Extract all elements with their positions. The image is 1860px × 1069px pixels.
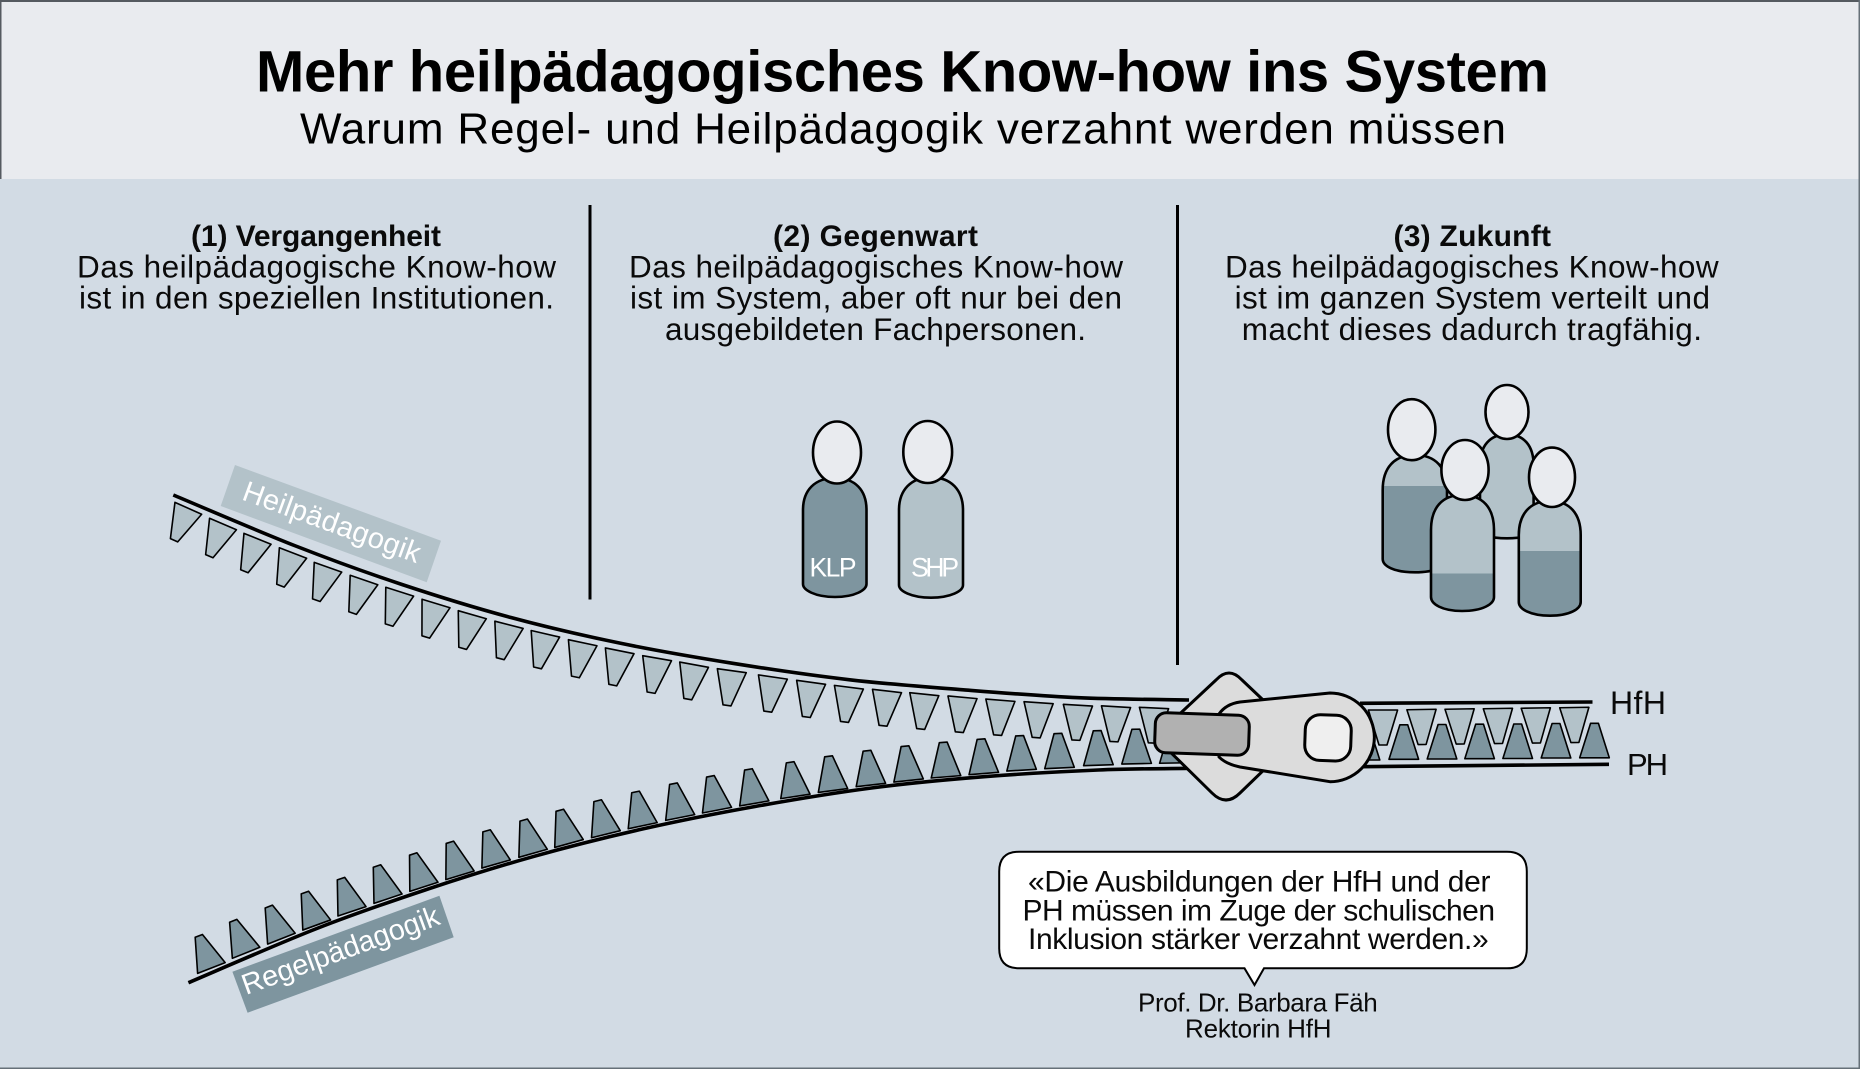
body: column 1: Das heilpädagogische Know-how	[77, 248, 556, 284]
icon: person KLP: KLP	[810, 552, 856, 582]
label: PH: PH	[1627, 747, 1668, 782]
pull tab hole	[1304, 714, 1352, 761]
label tag: Heilpädagogik	[221, 465, 441, 582]
text block: column 2 Gegenwart: ist im System, aber oft nur bei den	[630, 280, 1122, 316]
slider pull tab	[1219, 693, 1374, 782]
person front right	[1516, 448, 1584, 619]
heading: Gegenwart: (2) Gegenwart	[773, 220, 978, 253]
slider body diamond	[1155, 673, 1300, 800]
person back left	[1380, 399, 1450, 576]
zipper: top rail right part	[1360, 702, 1592, 703]
heading: Zukunft: (3) Zukunft	[1394, 220, 1551, 253]
quote attribution: Prof. Dr. Barbara Fäh	[1138, 988, 1378, 1018]
text block: column 3 Zukunft	[1225, 220, 1719, 347]
person back right	[1480, 385, 1534, 538]
text block: column 2 Gegenwart: ausgebildeten Fachpersonen.	[665, 311, 1086, 347]
zipper slider	[1154, 673, 1374, 800]
quote attribution: Rektorin HfH	[1185, 1013, 1332, 1043]
person front middle	[1428, 440, 1498, 614]
label: HfH: HfH	[1610, 685, 1666, 721]
zipper: lower teeth Regelpädagogik	[185, 723, 1609, 973]
text block: column 3 Zukunft: macht dieses dadurch tragfähig.	[1242, 311, 1702, 347]
text block: column 2 Gegenwart	[629, 220, 1123, 347]
callout: quote bubble: Inklusion stärker verzahnt werden.»	[1028, 923, 1489, 956]
icon: person SHP	[899, 421, 963, 598]
subtitle: Warum Regel- und Heilpädagogik verzahnt werden müssen	[300, 104, 1506, 153]
quote attribution	[1138, 988, 1378, 1043]
body: column 3: Das heilpädagogisches Know-how	[1225, 248, 1719, 284]
zipper: top rail	[173, 495, 1189, 700]
zipper: bottom rail right part	[1360, 764, 1609, 767]
zipper: bottom rail	[188, 768, 1189, 983]
zipper: upper teeth Heilpädagogik	[161, 502, 1590, 745]
divider left	[588, 205, 592, 600]
title: Mehr heilpädagogisches Know-how ins System	[256, 40, 1549, 105]
text block: column 1 Vergangenheit: ist in den speziellen Institutionen.	[79, 280, 554, 316]
label tag: Regelpädagogik: Regelpädagogik	[237, 900, 444, 1002]
icon: person SHP: SHP	[911, 552, 959, 582]
label tag: Heilpädagogik: Heilpädagogik	[238, 476, 425, 570]
icon: group of four people	[1380, 385, 1584, 619]
callout: quote bubble: «Die Ausbildungen der HfH und der	[1028, 866, 1490, 899]
icon: person KLP	[803, 422, 866, 597]
callout: quote bubble	[999, 852, 1527, 985]
panel: header band	[0, 0, 1860, 179]
text block: column 3 Zukunft: ist im ganzen System verteilt und	[1235, 280, 1710, 316]
text block: column 1 Vergangenheit	[77, 220, 556, 316]
body: column 2: Das heilpädagogisches Know-how	[629, 248, 1123, 284]
heading: Vergangenheit: (1) Vergangenheit	[191, 220, 441, 253]
callout: quote bubble: PH müssen im Zuge der schulischen	[1022, 894, 1495, 927]
divider right	[1176, 205, 1179, 665]
slider grey bar	[1154, 712, 1250, 756]
